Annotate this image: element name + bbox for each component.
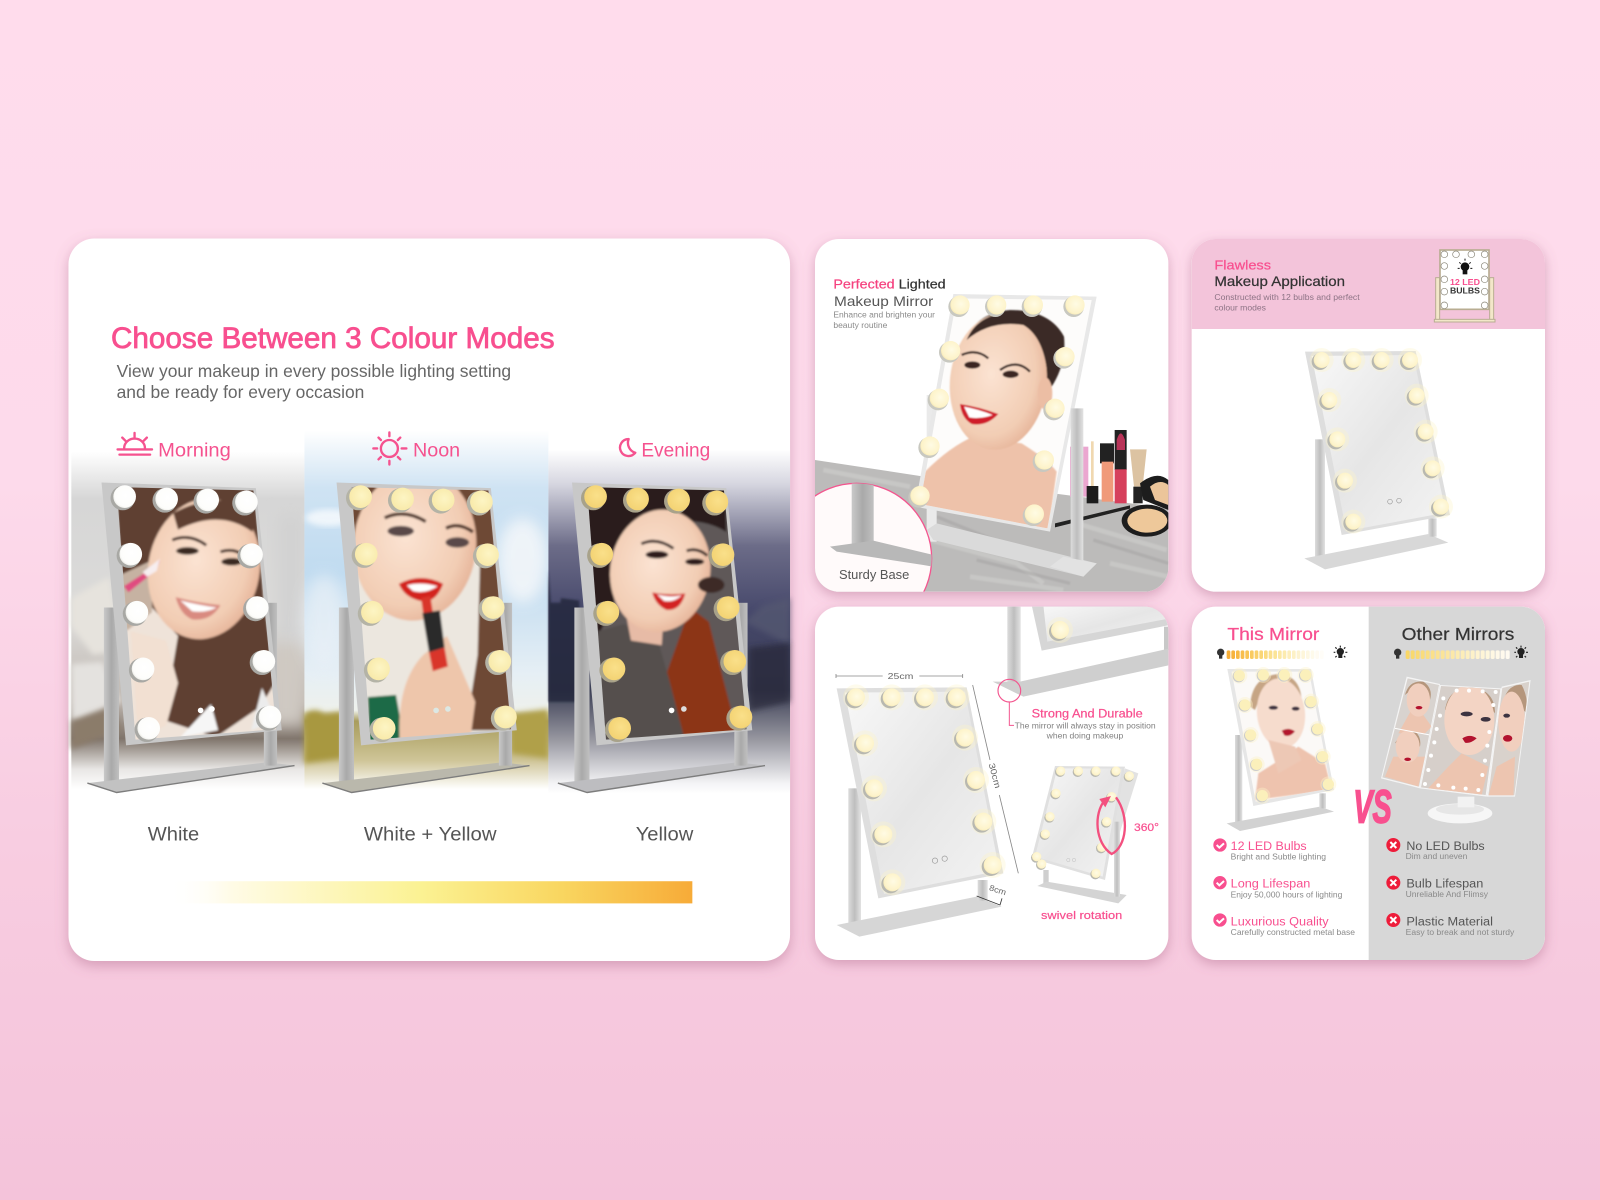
icon: moon	[620, 439, 635, 456]
pink header band	[1192, 239, 1545, 329]
dimension: 8cm	[977, 882, 1008, 905]
heading: perfected lighted makeup mirror	[833, 278, 946, 309]
feature: 12 led bulbs: Bright and Subtle lighting	[1231, 851, 1326, 861]
description: beauty routine	[833, 320, 888, 330]
marble table	[815, 460, 1168, 592]
heading: perfected lighted makeup mirror: Perfected Lighted	[833, 278, 946, 292]
heading: flawless: Makeup Application	[1214, 273, 1345, 289]
dimension: 30cm: 30cm	[987, 762, 1003, 789]
grey half: other mirrors	[1369, 607, 1545, 960]
drawback: no led bulbs	[1386, 838, 1485, 861]
label: swivel rotation: swivel rotation	[1041, 910, 1122, 922]
mirror: tri-fold	[1378, 675, 1532, 823]
label: 360 degrees: 360°	[1134, 822, 1159, 834]
label: noon: Noon	[413, 440, 460, 462]
description: colour modes	[1214, 302, 1266, 312]
icon: 12 led bulbs mirror	[1434, 250, 1495, 322]
mirror: yellow light	[558, 482, 765, 793]
mode labels	[148, 824, 694, 846]
scene: evening city backdrop	[548, 449, 790, 794]
inset: sturdy base	[815, 482, 932, 592]
heading: strong and durable: Strong And Durable	[1032, 706, 1143, 720]
label: evening: Evening	[641, 440, 710, 462]
description	[1015, 720, 1156, 741]
dimension: 25cm: 25cm	[888, 671, 913, 681]
feature: luxurious quality: Carefully constructed metal base	[1231, 927, 1355, 937]
icon: 12 led bulbs mirror: BULBS	[1450, 285, 1480, 295]
description: The mirror will always stay in position	[1015, 720, 1156, 730]
cropped mirror detail	[993, 605, 1170, 697]
panel: this mirror versus other mirrors	[1192, 607, 1545, 960]
mirror: swivel	[1031, 766, 1138, 903]
panel: choose between colour modes	[68, 238, 790, 961]
subtitle: and be ready for every occasion	[117, 382, 364, 402]
feature: 12 led bulbs	[1213, 838, 1326, 861]
scene: noon sky backdrop	[303, 431, 548, 789]
description	[833, 310, 935, 330]
description	[1214, 292, 1360, 312]
dimension: 30cm	[973, 685, 1018, 873]
mirror with smiling woman	[908, 294, 1097, 577]
callout circle	[1009, 702, 1014, 725]
icon: 12 led bulbs mirror: 12 LED	[1450, 277, 1480, 287]
subtitle: View your makeup in every possible lighting setting	[117, 361, 511, 381]
heading: colour modes: Choose Between 3 Colour Modes	[111, 323, 555, 355]
feature: luxurious quality	[1213, 913, 1355, 937]
feature: long lifespan: Enjoy 50,000 hours of lighting	[1231, 889, 1343, 899]
mirror: white with bulbs	[1304, 348, 1453, 569]
colour temperature bar	[169, 881, 692, 903]
drawback: no led bulbs: No LED Bulbs	[1406, 839, 1485, 853]
drawback: no led bulbs: Dim and uneven	[1406, 851, 1468, 861]
panel: flawless makeup application	[1192, 239, 1545, 592]
panel: dimensions and durability	[815, 605, 1170, 960]
label: morning: Morning	[158, 440, 231, 462]
drawback: bulb lifespan: Bulb Lifespan	[1406, 877, 1483, 891]
heading: perfected lighted makeup mirror: Makeup Mirror	[834, 293, 934, 309]
feature: long lifespan	[1213, 876, 1343, 899]
icon: rotation arrow	[1097, 796, 1125, 854]
mirror: white light	[87, 482, 295, 793]
description: Constructed with 12 bulbs and perfect	[1214, 292, 1360, 302]
mirror: dimensioned	[837, 684, 1006, 937]
heading: flawless: Flawless	[1214, 257, 1271, 272]
panel: perfected lighted makeup mirror	[808, 236, 1174, 601]
mode labels: Yellow	[636, 824, 694, 846]
mode labels: White + Yellow	[364, 824, 497, 846]
scene: morning backdrop	[71, 452, 304, 789]
heading: this mirror: This Mirror	[1227, 624, 1319, 644]
drawback: plastic material	[1386, 913, 1515, 937]
subtitle	[117, 361, 511, 402]
icon: sun	[373, 432, 406, 465]
description: Enhance and brighten your	[833, 310, 935, 320]
feature: 12 led bulbs: 12 LED Bulbs	[1231, 839, 1307, 853]
drawback: bulb lifespan	[1386, 876, 1489, 899]
mode labels: White	[148, 824, 199, 846]
mirror: blonde woman	[1227, 667, 1336, 831]
brightness scale: other mirrors	[1394, 646, 1528, 659]
brightness scale: this mirror	[1217, 646, 1347, 659]
dimension: 8cm: 8cm	[988, 882, 1008, 897]
feature: long lifespan: Long Lifespan	[1231, 877, 1310, 891]
heading: flawless	[1214, 257, 1345, 289]
dimension: 25cm	[836, 671, 963, 681]
drawback: plastic material: Easy to break and not sturdy	[1406, 927, 1515, 937]
description: when doing makeup	[1046, 731, 1124, 741]
vs badge: VS	[1353, 781, 1392, 833]
heading: other mirrors: Other Mirrors	[1402, 624, 1514, 644]
mirror: white plus yellow light	[322, 465, 530, 793]
inset: sturdy base: Sturdy Base	[839, 568, 909, 582]
drawback: bulb lifespan: Unreliable And Flimsy	[1406, 889, 1489, 899]
cosmetics	[1055, 430, 1172, 537]
drawback: plastic material: Plastic Material	[1406, 914, 1493, 928]
feature: luxurious quality: Luxurious Quality	[1231, 914, 1329, 928]
icon: sunrise	[118, 433, 152, 455]
